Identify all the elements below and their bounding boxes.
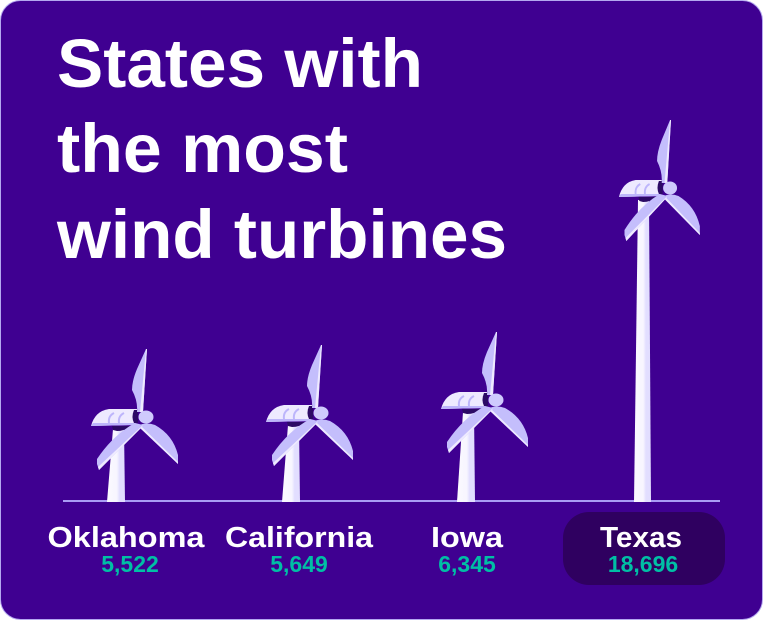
label: California: [225, 522, 374, 577]
turbine: Oklahoma: [91, 349, 178, 502]
label: Iowa: [431, 522, 504, 577]
turbine: Texas: [619, 120, 700, 502]
title: wind turbines: [56, 196, 507, 273]
title: the most: [57, 110, 348, 187]
label: Oklahoma: Oklahoma: [48, 522, 205, 554]
title: [56, 25, 507, 273]
label: California: California: [225, 522, 374, 554]
label: California: 5,649: [270, 551, 328, 577]
turbine: California: [266, 345, 353, 502]
label: Texas: [600, 522, 682, 577]
label: Iowa: 6,345: [438, 551, 496, 577]
label: Oklahoma: [48, 522, 205, 577]
label: Oklahoma: 5,522: [101, 551, 159, 577]
highlight pill: Texas: [563, 512, 725, 585]
baseline: [63, 500, 720, 502]
label: Iowa: Iowa: [431, 522, 504, 554]
label: Texas: Texas: [600, 522, 682, 554]
label: Texas: 18,696: [608, 551, 678, 577]
title: States with: [57, 25, 423, 102]
turbine: Iowa: [441, 332, 528, 502]
